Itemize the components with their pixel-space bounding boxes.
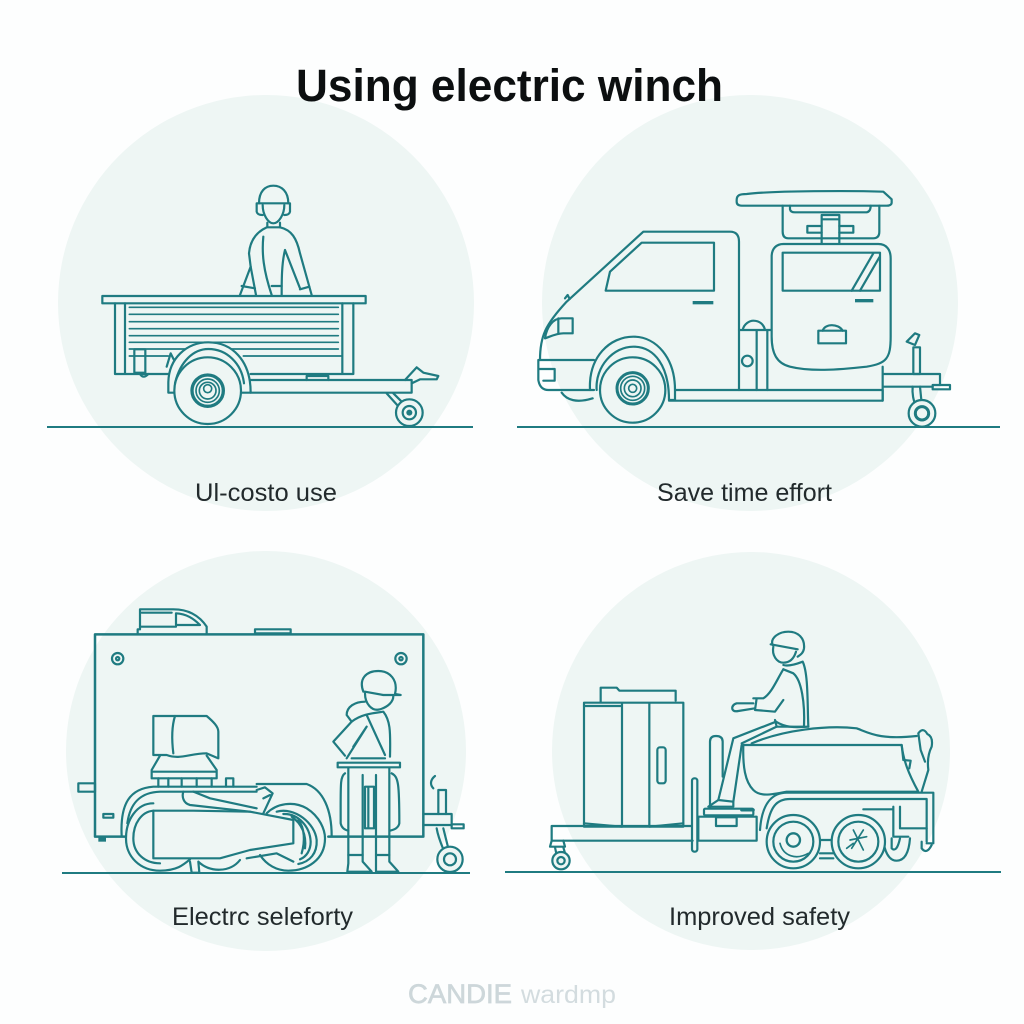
trailer bed bbox=[102, 296, 366, 380]
illustration: box trailer with machine and worker bbox=[78, 609, 464, 873]
cab bbox=[538, 232, 739, 401]
illustration: worker with trailer bbox=[102, 186, 438, 426]
label: Save time effort bbox=[657, 479, 832, 507]
background circle bbox=[58, 95, 474, 511]
label: Improved safety bbox=[669, 903, 851, 931]
ground line bbox=[505, 871, 1001, 873]
background circle bbox=[542, 95, 958, 511]
rider figure bbox=[708, 632, 808, 807]
step box bbox=[698, 809, 757, 841]
tandem wheels bbox=[767, 815, 885, 868]
background circle bbox=[552, 552, 950, 950]
crawler wheels bbox=[126, 792, 325, 873]
cabinet bbox=[584, 688, 683, 827]
label: Electrc seleforty bbox=[172, 903, 353, 931]
chassis and tank bbox=[669, 321, 883, 401]
illustration: rider on cart towing cabinet bbox=[550, 632, 933, 869]
platform and caster bbox=[550, 736, 723, 869]
panel: save time and effort bbox=[517, 95, 1000, 511]
panel: low cost to use bbox=[47, 95, 474, 511]
illustration: truck with winch box bbox=[538, 191, 950, 427]
ground line bbox=[517, 426, 1000, 428]
title: Using electric winch bbox=[296, 60, 723, 111]
roof mount bbox=[737, 191, 892, 244]
hitch and caster wheel bbox=[423, 776, 464, 872]
trailer tongue and caster wheel bbox=[251, 367, 438, 426]
ground line bbox=[47, 426, 473, 428]
rear box bbox=[772, 244, 891, 370]
footer watermark bbox=[408, 979, 616, 1009]
trailer body bbox=[78, 609, 423, 842]
tank with load bbox=[743, 727, 932, 795]
ground line bbox=[62, 872, 470, 874]
chassis bbox=[760, 793, 933, 861]
front wheel bbox=[590, 337, 675, 423]
worker figure bbox=[240, 186, 312, 295]
machine bbox=[121, 716, 332, 836]
worker figure bbox=[333, 671, 401, 872]
footer watermark: CANDIE bbox=[408, 979, 512, 1009]
main wheel bbox=[168, 342, 251, 424]
background circle bbox=[66, 551, 466, 951]
panel: electric safety bbox=[62, 551, 470, 951]
panel: improved safety bbox=[505, 552, 1001, 950]
label: Ul-costo use bbox=[195, 479, 337, 507]
tongue and caster wheel bbox=[883, 333, 950, 427]
footer watermark: wardmp bbox=[520, 981, 616, 1009]
